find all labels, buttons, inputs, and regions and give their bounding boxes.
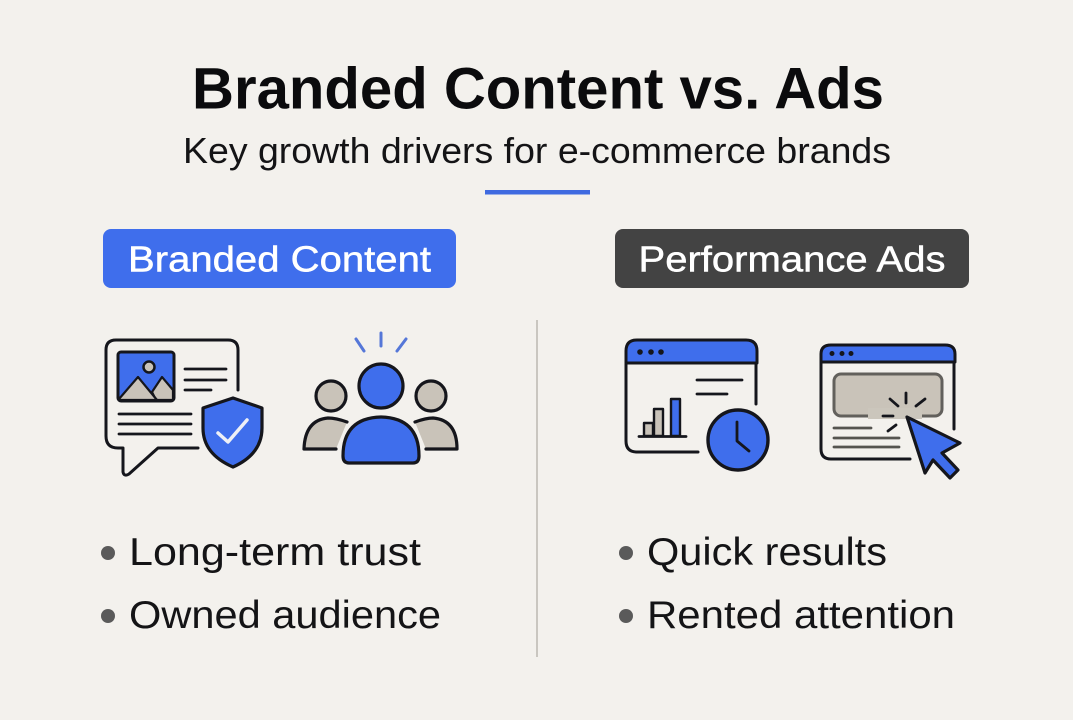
bullet 1: Long-term trust (129, 531, 421, 574)
window dots (830, 351, 854, 356)
bullet 1: Quick results (647, 531, 887, 574)
side person left (304, 381, 347, 449)
attention rays (356, 333, 406, 351)
speech bubble outline (106, 340, 238, 475)
text lines (697, 380, 742, 394)
heading: Performance Ads (615, 229, 969, 288)
window dots (637, 349, 664, 355)
central person (343, 364, 419, 463)
title accent rule (485, 190, 590, 194)
bullet 2: Rented attention (647, 594, 955, 637)
cursor arrow (907, 417, 960, 478)
bullet list: Performance Ads (619, 531, 955, 637)
ad banner (834, 374, 942, 419)
browser outline (626, 364, 756, 452)
clock (708, 410, 768, 470)
side person right (415, 381, 457, 449)
heading: Performance Ads: Performance Ads (638, 238, 946, 280)
subtitle: Key growth drivers for e-commerce brands (183, 130, 891, 171)
icon: analytics browser with clock (626, 340, 768, 470)
browser title bar (626, 340, 757, 363)
bar chart (639, 399, 686, 436)
icon: ad browser with cursor click (821, 345, 960, 478)
browser title bar (821, 345, 955, 362)
text lines (119, 369, 226, 434)
title: Branded Content vs. Ads (192, 56, 884, 122)
icon: content speech bubble with shield (106, 340, 262, 475)
text lines (834, 428, 899, 447)
heading: Branded Content (103, 229, 456, 288)
browser outline (821, 362, 954, 459)
icon: audience group (304, 333, 457, 463)
column divider (536, 320, 538, 657)
bullet 2: Owned audience (129, 594, 441, 637)
click sparks (883, 393, 925, 431)
image thumbnail (118, 352, 174, 401)
shield with check (203, 398, 262, 467)
heading: Branded Content: Branded Content (128, 238, 431, 280)
bullet list: Branded Content (101, 531, 441, 637)
